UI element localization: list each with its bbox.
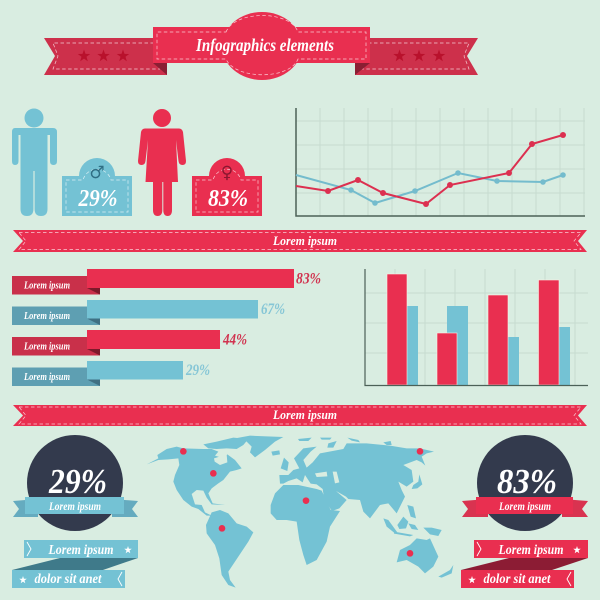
left folded ribbon [12, 540, 138, 588]
left stars [78, 50, 129, 61]
bar row: 44%: Lorem ipsum [23, 342, 70, 352]
title ribbon [44, 12, 478, 80]
blue bars [407, 306, 570, 385]
UK [281, 458, 289, 471]
bar row: 29%: 29% [185, 362, 210, 379]
female percentage: 83% [208, 186, 248, 212]
red series [296, 132, 566, 207]
right ribbon bottom text: dolor sit anet [484, 572, 551, 587]
bar row: 83%: 83% [296, 270, 321, 288]
divider 2 label: Lorem ipsum [272, 408, 337, 422]
New Zealand [438, 565, 453, 578]
right stars [393, 50, 445, 61]
bar row: 83% [12, 269, 321, 294]
North America [147, 447, 242, 516]
bar row: 29%: Lorem ipsum [23, 372, 70, 383]
bar row: 83%: Lorem ipsum [23, 280, 70, 292]
left ribbon top text: Lorem ipsum [48, 543, 114, 558]
Australia [397, 538, 438, 573]
right badge value: 83% [497, 462, 557, 501]
northern isles [298, 438, 392, 448]
vertical bar chart [365, 269, 588, 386]
Southeast Asia islands [383, 505, 442, 536]
bar row: 29% [12, 361, 210, 386]
bar row: 67% [12, 300, 285, 325]
female stat tag [192, 158, 262, 216]
divider ribbon 1 [13, 230, 587, 252]
female legs [153, 180, 172, 216]
icon: female figure [138, 109, 186, 216]
line chart [296, 108, 585, 216]
inland seas and bays [214, 454, 339, 483]
left badge label: Lorem ipsum [48, 501, 101, 513]
horizontal bar chart [12, 269, 321, 386]
Iceland [271, 450, 280, 456]
South America [206, 510, 253, 588]
bar row: 44% [12, 330, 247, 356]
Japan [412, 474, 422, 489]
bar row: 67%: Lorem ipsum [23, 311, 70, 322]
Greenland [235, 436, 283, 457]
red bars [387, 274, 559, 385]
divider ribbon 2 [13, 405, 587, 426]
icon: male symbol: ♂ [89, 163, 105, 183]
blue series [296, 170, 566, 206]
Africa [271, 485, 340, 565]
location markers [180, 448, 423, 557]
left badge value: 29% [48, 462, 107, 501]
icon: male figure [12, 108, 57, 216]
bar row: 67%: 67% [261, 301, 285, 318]
icon: female symbol: ♀ [221, 163, 233, 183]
world map [147, 436, 453, 588]
Eurasia [279, 443, 434, 518]
right folded ribbon [461, 540, 588, 588]
title text: Infographics elements [195, 35, 334, 55]
right ribbon top text: Lorem ipsum [498, 543, 564, 558]
bar row: 44%: 44% [222, 332, 247, 348]
male percentage: 29% [78, 186, 118, 212]
left ribbon bottom text: dolor sit anet [34, 572, 102, 587]
Arctic islands [203, 438, 248, 449]
left stat badge [13, 435, 138, 531]
divider 1 label: Lorem ipsum [272, 234, 337, 248]
male stat tag [62, 158, 132, 216]
right stat badge [462, 435, 588, 531]
right badge label: Lorem ipsum [498, 501, 551, 513]
